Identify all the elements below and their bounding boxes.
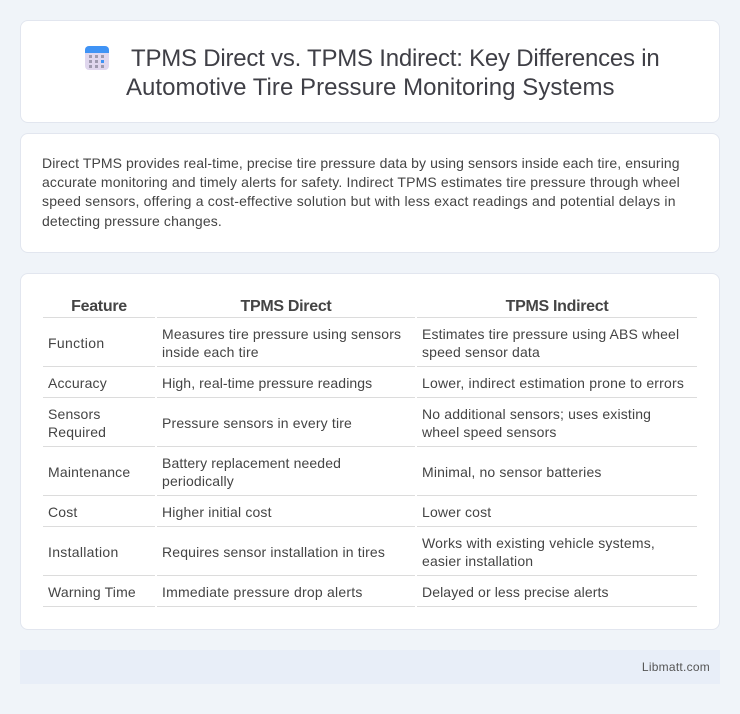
row: function: Function	[48, 335, 104, 351]
row: sensors required: Sensors	[48, 406, 100, 422]
comparison table	[43, 298, 697, 607]
row: function	[48, 326, 679, 360]
row: function: speed sensor data	[422, 344, 540, 360]
intro text: accurate monitoring and timely alerts for safety. Indirect TPMS estimates tire pressure through wheel	[42, 174, 680, 190]
intro text: Direct TPMS provides real-time, precise tire pressure data by using sensors inside each tire, ensuring	[42, 155, 680, 171]
row: sensors required	[48, 406, 651, 440]
row: warning time: Warning Time	[48, 584, 136, 600]
row: cost: Lower cost	[422, 504, 491, 520]
row: warning time: Immediate pressure drop alerts	[162, 584, 363, 600]
footer bar	[20, 650, 720, 684]
row: installation: Works with existing vehicle systems,	[422, 535, 655, 551]
row: function: inside each tire	[162, 344, 259, 360]
table header: TPMS Direct	[241, 298, 331, 315]
row: installation: easier installation	[422, 553, 533, 569]
row: sensors required: Pressure sensors in every tire	[162, 415, 352, 431]
row: maintenance: Maintenance	[48, 464, 130, 480]
row: maintenance: Minimal, no sensor batteries	[422, 464, 602, 480]
row: accuracy: High, real-time pressure readings	[162, 375, 372, 391]
panel: comparison table card	[20, 273, 720, 630]
row: sensors required: Required	[48, 424, 106, 440]
row: sensors required: wheel speed sensors	[422, 424, 557, 440]
row: accuracy: Lower, indirect estimation prone to errors	[422, 375, 684, 391]
row: warning time: Delayed or less precise alerts	[422, 584, 609, 600]
row: cost	[48, 504, 492, 520]
row: function: Estimates tire pressure using ABS wheel	[422, 326, 679, 342]
row: accuracy: Accuracy	[48, 375, 107, 391]
row: accuracy	[48, 375, 684, 391]
intro text: speed sensors, offering a cost-effective solution but with less exact readings and potential delays in	[42, 193, 676, 209]
row: installation: Installation	[48, 544, 119, 560]
row: function: Measures tire pressure using sensors	[162, 326, 401, 342]
footer credit: Libmatt.com	[642, 660, 710, 674]
heading: TPMS Direct vs. TPMS Indirect: Key Differences in	[131, 45, 660, 72]
intro text	[42, 155, 680, 229]
panel: title card	[20, 20, 720, 123]
row: cost: Higher initial cost	[162, 504, 272, 520]
panel: intro card	[20, 133, 720, 253]
table header	[71, 298, 608, 315]
row: maintenance	[48, 455, 602, 489]
table header: TPMS Indirect	[506, 298, 608, 315]
row: warning time	[48, 584, 609, 600]
row: installation	[48, 535, 655, 569]
heading	[126, 45, 660, 101]
table header: Feature	[71, 298, 127, 315]
intro text: detecting pressure changes.	[42, 213, 222, 229]
row: maintenance: periodically	[162, 473, 234, 489]
row: sensors required: No additional sensors; uses existing	[422, 406, 651, 422]
row: installation: Requires sensor installation in tires	[162, 544, 385, 560]
row: maintenance: Battery replacement needed	[162, 455, 341, 471]
row: cost: Cost	[48, 504, 77, 520]
heading: Automotive Tire Pressure Monitoring Systems	[126, 74, 615, 101]
icon: calendar grid	[85, 46, 109, 70]
